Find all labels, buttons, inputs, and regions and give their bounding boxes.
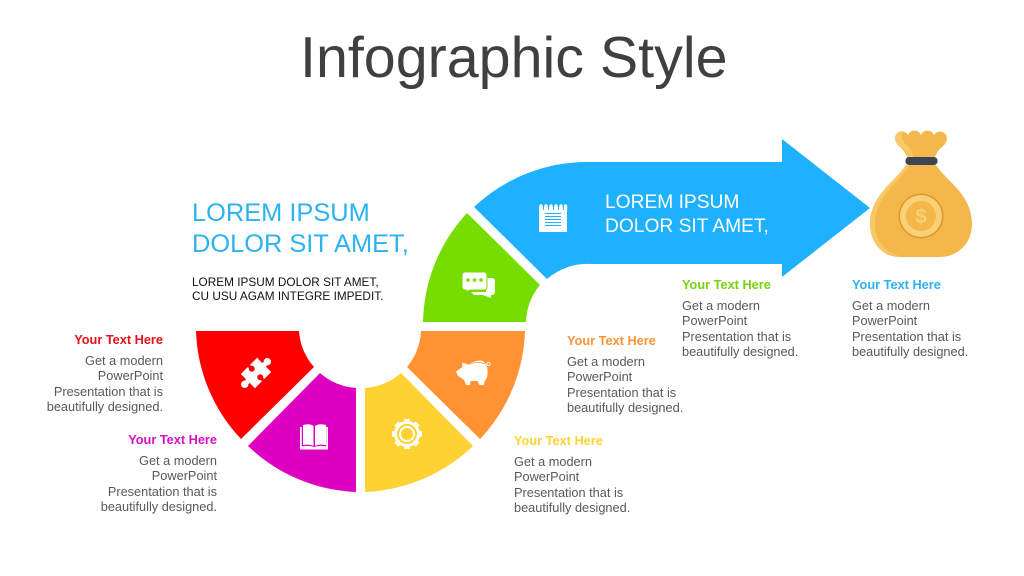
subheading: CU USU AGAM INTEGRE IMPEDIT. <box>192 289 383 303</box>
icon: gear <box>392 419 422 449</box>
icon: open book <box>300 424 328 450</box>
segment: green <box>423 213 540 322</box>
text: Your Text Here <box>514 433 603 448</box>
text: Your Text Here <box>128 432 217 447</box>
title: Infographic Style <box>300 26 728 90</box>
main heading: LOREM IPSUM <box>192 199 370 227</box>
coin <box>898 194 944 238</box>
text: Get a modern <box>567 354 645 369</box>
segment: orange <box>407 331 525 439</box>
dollar sign: $ <box>915 206 927 228</box>
icon: notepad <box>539 205 567 232</box>
text: Get a modern <box>514 454 592 469</box>
text block: green <box>682 277 798 359</box>
icon: chat bubbles <box>462 272 495 298</box>
segment: red <box>196 331 314 439</box>
text: Presentation that is <box>682 329 791 344</box>
text: Presentation that is <box>54 384 163 399</box>
text: Presentation that is <box>108 484 217 499</box>
text: PowerPoint <box>152 468 217 483</box>
subheading: LOREM IPSUM DOLOR SIT AMET, <box>192 275 379 289</box>
text: Your Text Here <box>852 277 941 292</box>
arrow heading <box>605 192 769 236</box>
subheading <box>192 275 383 303</box>
text block: red <box>47 332 163 414</box>
text: Presentation that is <box>852 329 961 344</box>
text: beautifully designed. <box>682 344 798 359</box>
text: beautifully designed. <box>514 500 630 515</box>
text: Presentation that is <box>514 485 623 500</box>
bag ruffle and neck <box>895 131 947 159</box>
text: beautifully designed. <box>852 344 968 359</box>
text: PowerPoint <box>567 369 632 384</box>
text: Presentation that is <box>567 385 676 400</box>
text block: blue <box>852 277 968 359</box>
text: Your Text Here <box>567 333 656 348</box>
arrow heading: DOLOR SIT AMET, <box>605 216 769 236</box>
text: Get a modern <box>852 298 930 313</box>
text: Get a modern <box>85 353 163 368</box>
text: PowerPoint <box>98 368 163 383</box>
text: Your Text Here <box>74 332 163 347</box>
text: Get a modern <box>682 298 760 313</box>
text block: orange <box>567 333 683 415</box>
text: Your Text Here <box>682 277 771 292</box>
bag shadow side <box>870 165 910 257</box>
text: PowerPoint <box>682 313 747 328</box>
main heading <box>192 199 409 258</box>
text block: yellow <box>514 433 630 515</box>
text: beautifully designed. <box>567 400 683 415</box>
icon: piggy bank <box>456 360 490 385</box>
main heading: DOLOR SIT AMET, <box>192 230 409 258</box>
segment: magenta <box>248 373 356 492</box>
segment: yellow <box>365 373 473 492</box>
text: beautifully designed. <box>101 499 217 514</box>
arrow heading: LOREM IPSUM <box>605 192 739 213</box>
bag body <box>870 165 972 257</box>
text: beautifully designed. <box>47 399 163 414</box>
text: Get a modern <box>139 453 217 468</box>
text block: magenta <box>101 432 217 514</box>
icon: money bag <box>870 131 972 257</box>
bag tie <box>906 157 938 165</box>
text: PowerPoint <box>852 313 917 328</box>
text: PowerPoint <box>514 469 579 484</box>
arrow: blue <box>474 139 870 279</box>
icon: puzzle piece <box>234 351 278 395</box>
